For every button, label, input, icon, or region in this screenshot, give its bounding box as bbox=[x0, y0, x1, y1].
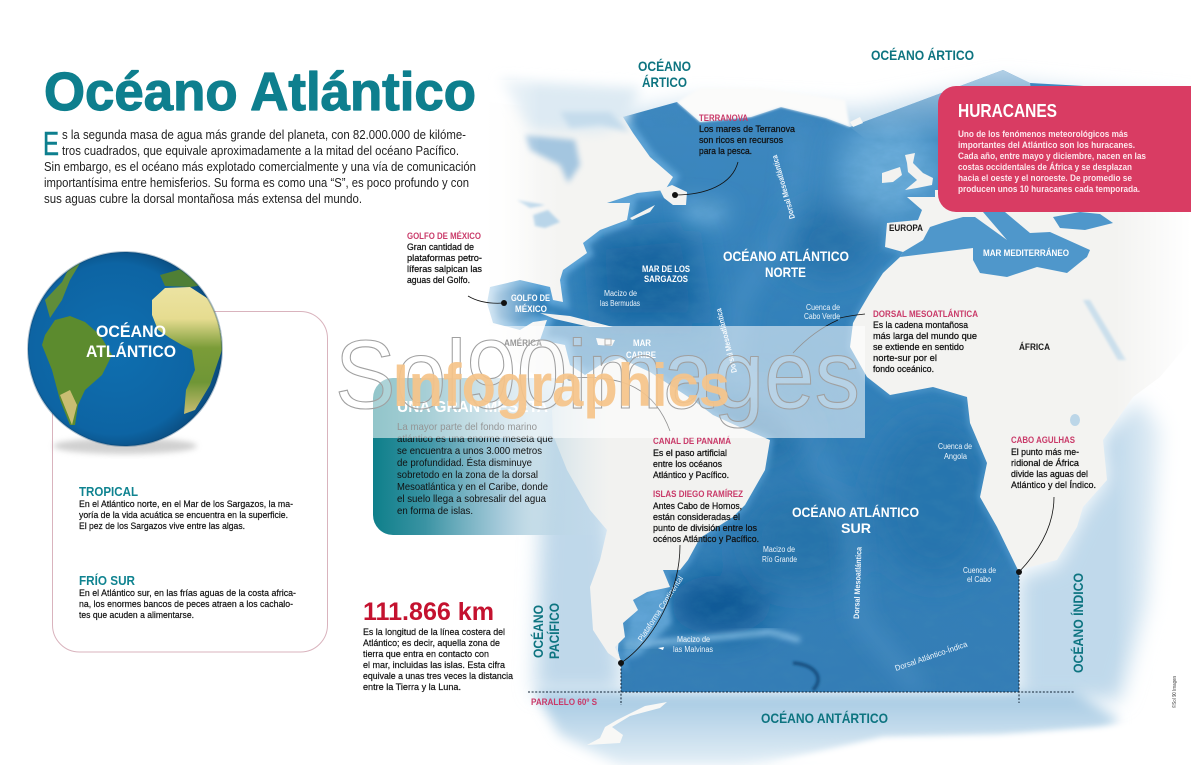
annotation: terranova bbox=[699, 113, 796, 157]
annotation: cabo agulhas: divide las aguas del bbox=[1011, 469, 1088, 480]
map labels: seabed features: Macizo de bbox=[677, 635, 710, 644]
map labels: seabed features: las Bermudas bbox=[600, 299, 640, 308]
callout: 111.866 km: el mar, incluidas las islas. Esta cifra bbox=[363, 660, 506, 671]
map labels: seabed features: Cabo Verde bbox=[804, 312, 840, 321]
callout: 111.866 km: entre la Tierra y la Luna. bbox=[363, 682, 461, 693]
map labels: oceans and seas: MÉXICO bbox=[515, 304, 547, 314]
annotation: terranova: para la pesca. bbox=[699, 146, 752, 157]
annotation: golfo de méxico: líferas salpican las bbox=[407, 264, 482, 275]
panel: una gran meseta: atlántico es una enorme meseta que bbox=[397, 433, 553, 445]
watermark band and logo: Sol90images bbox=[335, 320, 860, 429]
annotation: canal de panamá: Atlántico y Pacífico. bbox=[653, 470, 729, 481]
text: frío sur: na, los enormes bancos de peces atraen a los cachalo- bbox=[79, 599, 293, 610]
annotation: canal de panamá: entre los océanos bbox=[653, 459, 722, 470]
panel: huracanes: Cada año, entre mayo y diciembre, nacen en las bbox=[958, 151, 1146, 162]
map labels: oceans and seas: OCÉANO ATLÁNTICO bbox=[792, 504, 919, 520]
map labels: oceans and seas: EUROPA bbox=[889, 223, 923, 233]
annotation: islas diego ramírez: Antes Cabo de Hornos, bbox=[653, 501, 742, 512]
callout: 111.866 km: Atlántico; es decir, aquella zona de bbox=[363, 638, 500, 649]
map labels: seabed features: Angola bbox=[944, 452, 967, 461]
panel: huracanes: Uno de los fenómenos meteorológicos más bbox=[958, 129, 1128, 140]
text: frío sur: FRÍO SUR bbox=[79, 573, 136, 588]
text: tropical: El pez de los Sargazos vive entre las algas. bbox=[79, 521, 245, 532]
annotation: dorsal mesoatlántica: DORSAL MESOATLÁNTICA bbox=[873, 309, 978, 320]
panel: huracanes: importantes del Atlántico son los huracanes. bbox=[958, 140, 1135, 151]
intro text: E bbox=[43, 125, 59, 162]
annotation: golfo de méxico: Gran cantidad de bbox=[407, 242, 474, 253]
annotation: terranova: TERRANOVA bbox=[699, 113, 748, 124]
map labels: oceans and seas: ÁFRICA bbox=[1019, 342, 1050, 352]
map labels: oceans and seas: MAR bbox=[633, 338, 651, 348]
text: tropical: TROPICAL bbox=[79, 484, 138, 499]
map labels: oceans and seas: SUR bbox=[841, 520, 871, 536]
map labels: oceans and seas: OCÉANO ÁRTICO bbox=[871, 47, 974, 63]
annotation: islas diego ramírez: punto de división entre los bbox=[653, 523, 757, 534]
text: tropical: yoría de la vida acuática se encuentra en la superficie. bbox=[79, 510, 288, 521]
map labels: oceans and seas: ÁRTICO bbox=[642, 74, 687, 90]
annotation: canal de panamá bbox=[653, 436, 731, 481]
map labels: oceans and seas: OCÉANO ÍNDICO bbox=[1070, 573, 1086, 673]
intro text: sus aguas cubre la dorsal montañosa más extensa del mundo. bbox=[44, 191, 362, 206]
globe: ATLÁNTICO bbox=[86, 342, 176, 361]
panel: huracanes: costas occidentales de África y se desplazan bbox=[958, 162, 1132, 173]
leader lines and dots bbox=[468, 162, 1054, 666]
text: frío sur bbox=[79, 573, 296, 621]
map labels: oceans and seas: MAR DE LOS bbox=[642, 264, 690, 274]
callout: 111.866 km: Es la longitud de la línea costera del bbox=[363, 627, 505, 638]
annotation: islas diego ramírez: están consideradas el bbox=[653, 512, 740, 523]
title: Océano Atlántico bbox=[44, 62, 476, 122]
annotation: golfo de méxico: plataformas petro- bbox=[407, 253, 482, 264]
map labels: seabed features: Dorsal Mesoatlántica bbox=[770, 154, 797, 220]
panel: una gran meseta: se encuentra a unos 3.000 metros bbox=[397, 445, 542, 457]
annotation: golfo de méxico: GOLFO DE MÉXICO bbox=[407, 231, 481, 242]
text: frío sur: En el Atlántico sur, en las frías aguas de la costa africa- bbox=[79, 588, 296, 599]
intro text: importantísima entre hemisferios. Su forma es como una “S”, es poco profundo y con bbox=[44, 175, 469, 190]
watermark band and logo: Infographics bbox=[393, 352, 730, 419]
annotation: islas diego ramírez: ISLAS DIEGO RAMÍREZ bbox=[653, 489, 743, 500]
annotation: golfo de méxico: aguas del Golfo. bbox=[407, 275, 470, 286]
intro text: Sin embargo, es el océano más explotado comercialmente y una vía de comunicación bbox=[44, 159, 476, 174]
map labels: seabed features: Dorsal Mesoatlántica bbox=[852, 546, 864, 619]
annotation: dorsal mesoatlántica bbox=[873, 309, 978, 375]
panel: huracanes bbox=[938, 86, 1191, 212]
annotation: cabo agulhas bbox=[1011, 435, 1096, 491]
annotation: dorsal mesoatlántica: se extiende en sentido bbox=[873, 342, 964, 353]
credit: ©Sol 90 Imagen bbox=[1171, 676, 1178, 708]
map of the Atlantic Ocean bbox=[487, 70, 1166, 765]
panel: una gran meseta bbox=[373, 378, 610, 535]
map labels: oceans and seas: OCÉANO bbox=[530, 605, 546, 658]
callout: 111.866 km: tierra que entra en contacto con bbox=[363, 649, 489, 660]
text: frío sur: tes que acuden a alimentarse. bbox=[79, 610, 194, 621]
map labels: seabed features: Dorsal Mesoatlántica bbox=[714, 307, 739, 374]
callout: 111.866 km: 111.866 km bbox=[363, 598, 494, 626]
annotation: terranova: son ricos en recursos bbox=[699, 135, 783, 146]
map labels: oceans and seas: GOLFO DE bbox=[511, 293, 550, 303]
map labels: oceans and seas: OCÉANO bbox=[638, 58, 691, 74]
annotation: dorsal mesoatlántica: norte-sur por el bbox=[873, 353, 937, 364]
map labels: oceans and seas: SARGAZOS bbox=[644, 274, 688, 284]
map labels: seabed features: Dorsal Atlántico-Índica bbox=[894, 639, 969, 673]
map labels: seabed features: Río Grande bbox=[762, 555, 797, 564]
panel: huracanes: HURACANES bbox=[958, 101, 1057, 121]
annotation: cabo agulhas: ridional de África bbox=[1011, 458, 1080, 469]
annotation: islas diego ramírez bbox=[653, 489, 759, 545]
square marker: Panama area bbox=[605, 339, 611, 345]
map labels: oceans and seas: MAR MEDITERRÁNEO bbox=[983, 248, 1069, 258]
intro text: tros cuadrados, que equivale aproximadamente a la mitad del océano Pacífico. bbox=[62, 143, 459, 158]
map labels: seabed features: Cuenca de bbox=[806, 303, 840, 312]
intro text: s la segunda masa de agua más grande del planeta, con 82.000.000 de kilóme- bbox=[62, 127, 466, 142]
map labels: oceans and seas: OCÉANO ANTÁRTICO bbox=[761, 710, 888, 726]
map labels: seabed features: Macizo de bbox=[763, 545, 795, 554]
parallel 60º S dotted lines bbox=[528, 572, 1075, 705]
map labels: seabed features: Plataforma Continental bbox=[636, 574, 685, 643]
map labels: seabed features: el Cabo bbox=[967, 575, 991, 584]
annotation: golfo de méxico bbox=[407, 231, 482, 286]
intro text bbox=[43, 125, 476, 206]
map labels: seabed features: las Malvinas bbox=[673, 645, 713, 654]
map labels: oceans and seas: AMÉRICA bbox=[504, 338, 542, 348]
panel: una gran meseta: La mayor parte del fondo marino bbox=[397, 421, 537, 433]
map labels: oceans and seas: NORTE bbox=[765, 264, 806, 280]
annotation: dorsal mesoatlántica: más larga del mundo que bbox=[873, 331, 977, 342]
panel: una gran meseta: el suelo llega a sobresalir del agua bbox=[397, 493, 546, 505]
annotation: dorsal mesoatlántica: Es la cadena montañosa bbox=[873, 320, 969, 331]
globe bbox=[28, 252, 222, 454]
panel: huracanes: producen unos 10 huracanes cada temporada. bbox=[958, 184, 1140, 195]
annotation: cabo agulhas: El punto más me- bbox=[1011, 447, 1079, 458]
annotation: islas diego ramírez: océnos Atlántico y Pacífico. bbox=[653, 534, 759, 545]
annotation: terranova: Los mares de Terranova bbox=[699, 124, 796, 135]
map labels: seabed features: Cuenca de bbox=[938, 442, 972, 451]
panel: una gran meseta: de profundidad. Ésta disminuye bbox=[397, 456, 532, 469]
map labels: seabed features bbox=[600, 154, 996, 673]
panel: life zones bbox=[52, 312, 328, 652]
panel: huracanes: hacia el oeste y el noroeste. De promedio se bbox=[958, 173, 1132, 184]
map labels: seabed features: Cuenca de bbox=[963, 566, 996, 575]
label: paralelo 60º S: PARALELO 60º S bbox=[531, 697, 597, 708]
panel: una gran meseta: en forma de islas. bbox=[397, 505, 473, 517]
map labels: oceans and seas: OCÉANO ATLÁNTICO bbox=[723, 248, 849, 264]
callout: 111.866 km: equivale a unas tres veces la distancia bbox=[363, 671, 514, 682]
annotation: cabo agulhas: CABO AGULHAS bbox=[1011, 435, 1075, 446]
text: tropical bbox=[79, 484, 293, 532]
panel: una gran meseta: sobretodo en la zona de la dorsal bbox=[397, 469, 538, 481]
text: tropical: En el Atlántico norte, en el Mar de los Sargazos, la ma- bbox=[79, 499, 293, 510]
globe: OCÉANO bbox=[96, 322, 166, 341]
callout: 111.866 km bbox=[363, 598, 514, 693]
annotation: canal de panamá: CANAL DE PANAMÁ bbox=[653, 436, 731, 447]
map labels: oceans and seas: CARIBE bbox=[626, 350, 656, 360]
panel: una gran meseta: Mesoatlántica y en el Caribe, donde bbox=[397, 481, 548, 493]
map labels: seabed features: Macizo de bbox=[604, 289, 637, 298]
map labels: oceans and seas: PACÍFICO bbox=[546, 603, 562, 659]
annotation: canal de panamá: Es el paso artificial bbox=[653, 448, 727, 459]
annotation: dorsal mesoatlántica: fondo oceánico. bbox=[873, 364, 934, 375]
annotation: cabo agulhas: Atlántico y del Índico. bbox=[1011, 480, 1096, 491]
panel: una gran meseta: UNA GRAN MESETA bbox=[397, 399, 548, 416]
map labels: oceans and seas bbox=[504, 47, 1086, 726]
